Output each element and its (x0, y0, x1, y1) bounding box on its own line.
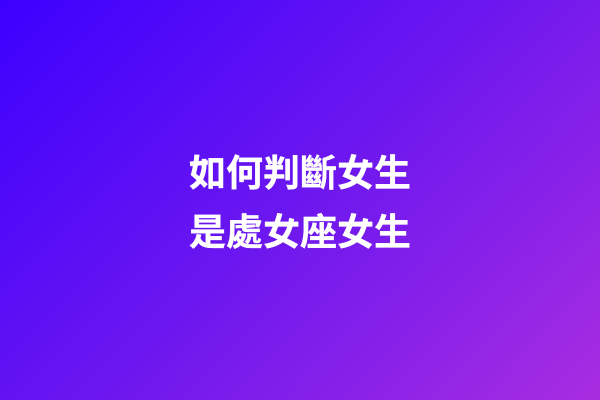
title: 如何判斷女生 (189, 153, 411, 194)
title: 是處女座女生 (189, 212, 411, 253)
title (189, 153, 411, 253)
